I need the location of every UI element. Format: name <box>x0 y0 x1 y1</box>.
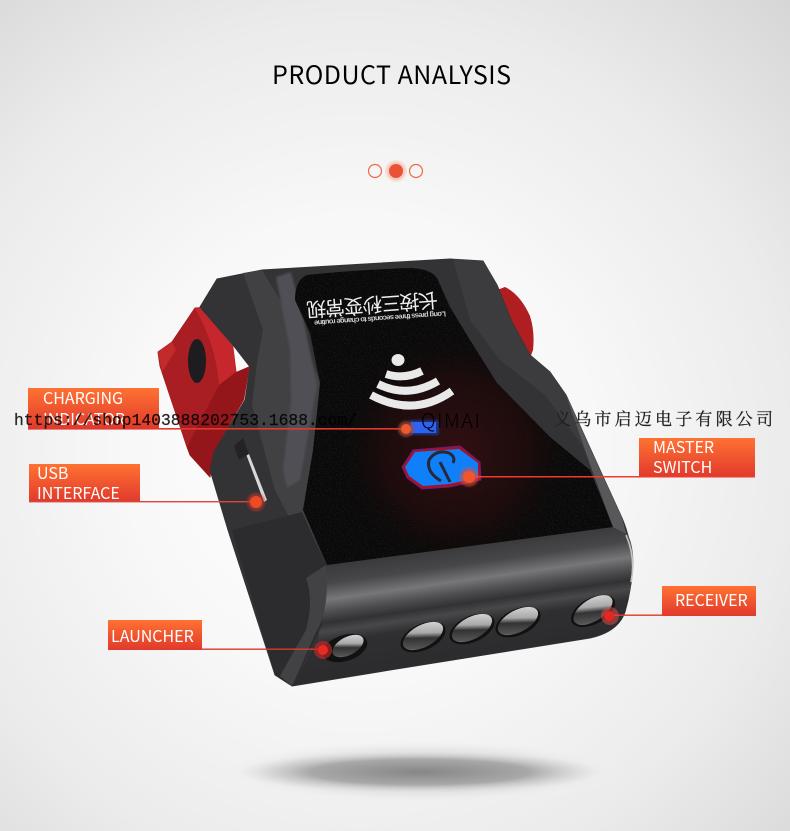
callout: master switch: SWITCH <box>653 454 712 478</box>
callout: usb interface: INTERFACE <box>37 480 120 504</box>
callout: master switch: MASTER <box>653 434 714 458</box>
callout: launcher: LAUNCHER <box>111 623 194 647</box>
left red clip <box>158 307 250 477</box>
callout: launcher <box>108 620 332 659</box>
watermark: shop url: https://shop1403888202753.1688.com/ <box>14 412 357 431</box>
callout: charging indicator <box>28 385 414 437</box>
callout: charging indicator: CHARGING <box>43 385 123 409</box>
icon: power symbol <box>428 452 454 482</box>
power button <box>402 446 481 489</box>
callout: master switch <box>460 434 755 486</box>
floor shadow <box>217 740 629 804</box>
watermark: company name: 义乌市启迈电子有限公司 <box>554 405 773 430</box>
front band <box>292 527 633 686</box>
black face panel <box>295 268 613 565</box>
product: clip receiver device <box>158 259 633 686</box>
USB port slit <box>246 454 267 502</box>
panel english text: Long press three seconds to change routine <box>314 309 446 328</box>
pagination dots <box>368 161 422 181</box>
title: PRODUCT ANALYSIS <box>272 56 511 92</box>
icon: wireless signal <box>371 354 452 406</box>
device body <box>200 259 632 686</box>
callout: charging indicator: INDICATOR <box>43 406 125 430</box>
callout: receiver: RECEIVER <box>675 587 748 611</box>
right red clip <box>497 287 534 358</box>
callout: receiver <box>601 586 756 625</box>
left corner <box>232 512 326 686</box>
right rim highlight <box>626 535 633 582</box>
charging indicator light <box>409 420 439 435</box>
panel chinese text: 长按三秒变常规 <box>305 287 439 326</box>
watermark: brand: QIMAI <box>421 405 480 434</box>
callout: usb interface: USB <box>37 460 68 484</box>
callout: usb interface <box>29 460 265 511</box>
right bezel highlight <box>453 259 622 528</box>
emitter and receiver lenses <box>319 588 620 667</box>
left bezel highlight <box>243 270 326 573</box>
